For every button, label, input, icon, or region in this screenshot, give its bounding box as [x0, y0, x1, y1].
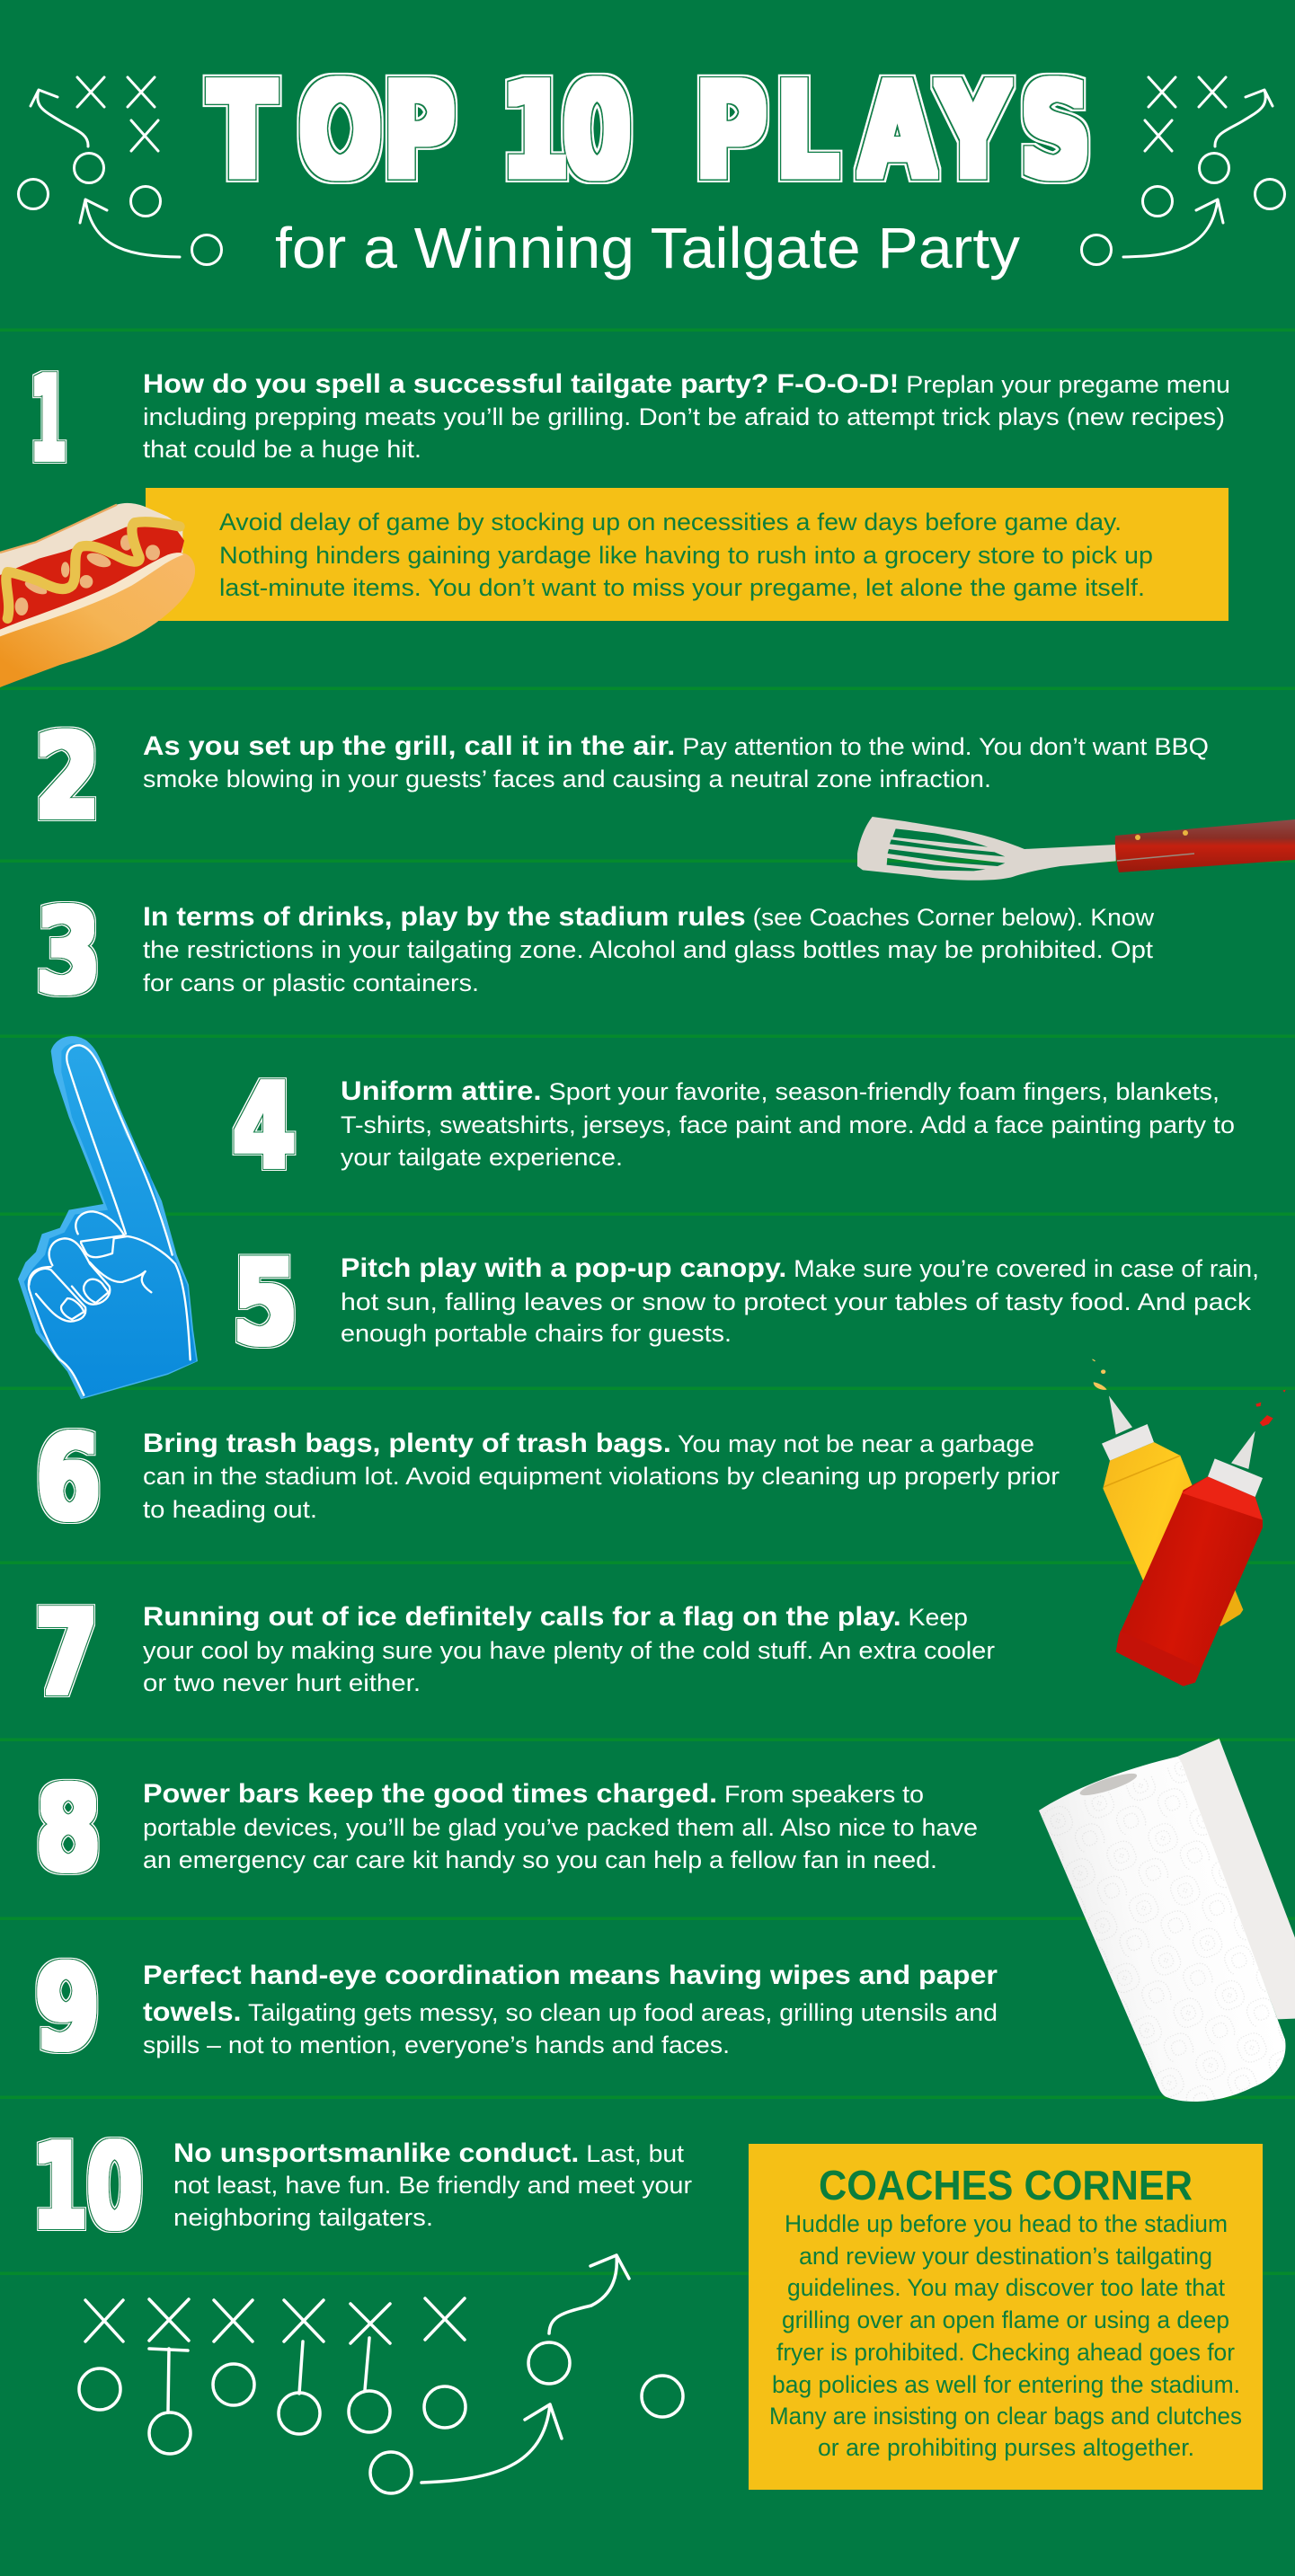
- play 9 text: [143, 1961, 998, 2058]
- play 3 text: [143, 902, 1155, 996]
- play 4 text: [341, 1076, 1235, 1171]
- play 1 text: How do you spell a successful tailgate party? F-O-O-D! Preplan your pregame menu: [143, 369, 1230, 399]
- title: 10: [501, 57, 631, 206]
- play diagram: top right: [1082, 77, 1285, 264]
- callout: stock up: [146, 488, 1228, 621]
- play 4 text: Uniform attire. Sport your favorite, season-friendly foam fingers, blankets,: [341, 1076, 1220, 1106]
- coaches corner body: guidelines. You may discover too late that: [787, 2274, 1226, 2301]
- play 10 text: No unsportsmanlike conduct. Last, but: [173, 2138, 685, 2168]
- play 8: [36, 1763, 978, 1897]
- play 2 text: As you set up the grill, call it in the air. Pay attention to the wind. You don’t want BBQ: [143, 731, 1209, 761]
- callout: stock up: Avoid delay of game by stocking up on necessities a few days before game day.: [219, 509, 1122, 536]
- icon: foam finger: [18, 1036, 198, 1399]
- play 7: [35, 1587, 995, 1721]
- play 10 text: neighboring tailgaters.: [173, 2204, 433, 2231]
- icon: spatula: [857, 817, 1295, 881]
- play 8 text: an emergency car care kit handy so you can help a fellow fan in need.: [143, 1846, 937, 1873]
- coaches corner body: and review your destination’s tailgating: [799, 2243, 1212, 2270]
- play 3: [36, 885, 1155, 1019]
- title: PLAYS: [696, 57, 1090, 206]
- play 4 text: your tailgate experience.: [341, 1144, 623, 1171]
- play 5 text: [341, 1253, 1259, 1347]
- play 4 text: T-shirts, sweatshirts, jerseys, face paint and more. Add a face painting party to: [341, 1111, 1235, 1138]
- play 9 text: towels. Tailgating gets messy, so clean up food areas, grilling utensils and: [143, 1997, 998, 2027]
- play 1 text: including prepping meats you’ll be grilling. Don’t be afraid to attempt trick plays (new recipes): [143, 403, 1225, 430]
- play 6 text: [143, 1429, 1060, 1523]
- number 4: 4: [233, 1060, 296, 1194]
- coaches corner heading: COACHES CORNER: [819, 2162, 1193, 2209]
- play 5 text: enough portable chairs for guests.: [341, 1320, 732, 1347]
- play 6 text: can in the stadium lot. Avoid equipment violations by cleaning up properly prior: [143, 1463, 1060, 1490]
- play 8 text: Power bars keep the good times charged. From speakers to: [143, 1779, 924, 1809]
- play 5 text: Pitch play with a pop-up canopy. Make sure you’re covered in case of rain,: [341, 1253, 1259, 1283]
- icon: mustard and ketchup bottles: [1092, 1359, 1286, 1686]
- play 10 text: [173, 2138, 692, 2231]
- play diagram: bottom: [79, 2255, 683, 2493]
- play 8 text: portable devices, you’ll be glad you’ve packed them all. Also nice to have: [143, 1814, 978, 1841]
- play 1: 1: [31, 353, 66, 487]
- play 2 text: [143, 731, 1209, 792]
- play 7 text: [143, 1602, 995, 1696]
- play 5 text: hot sun, falling leaves or snow to protect your tables of tasty food. And pack: [341, 1288, 1252, 1315]
- coaches corner body: or are prohibiting purses altogether.: [818, 2434, 1194, 2461]
- number 9: 9: [35, 1942, 100, 2076]
- play 9: [35, 1942, 998, 2076]
- play 8 text: [143, 1779, 978, 1873]
- coaches corner body: fryer is prohibited. Checking ahead goes for: [776, 2339, 1235, 2366]
- number 8: 8: [36, 1763, 101, 1897]
- coaches corner body: grilling over an open flame or using a deep: [782, 2306, 1229, 2333]
- coaches corner body: [769, 2210, 1242, 2461]
- coaches corner body: Huddle up before you head to the stadium: [785, 2210, 1228, 2237]
- play 4: [233, 1060, 1235, 1194]
- play 1 text: [143, 369, 1230, 463]
- number 7: 7: [35, 1587, 98, 1721]
- play 3 text: for cans or plastic containers.: [143, 969, 479, 996]
- play 2 text: smoke blowing in your guests’ faces and causing a neutral zone infraction.: [143, 766, 991, 792]
- play 2: [35, 711, 1209, 845]
- callout: stock up: last-minute items. You don’t want to miss your pregame, let alone the game itself.: [219, 574, 1145, 601]
- title: [209, 57, 1090, 206]
- mustard bottle: [1092, 1359, 1243, 1626]
- play 7 text: or two never hurt either.: [143, 1669, 421, 1696]
- play 9 text: Perfect hand-eye coordination means having wipes and paper: [143, 1961, 998, 1990]
- callout: stock up: Nothing hinders gaining yardage like having to rush into a grocery store to pick up: [219, 542, 1153, 569]
- play 6 text: to heading out.: [143, 1496, 317, 1523]
- coaches corner body: bag policies as well for entering the stadium.: [772, 2371, 1240, 2398]
- play diagram: top left: [18, 77, 221, 264]
- play 3 text: the restrictions in your tailgating zone. Alcohol and glass bottles may be prohibited. Opt: [143, 936, 1154, 963]
- number 5: 5: [233, 1236, 297, 1370]
- number 3: 3: [36, 885, 101, 1019]
- play 7 text: your cool by making sure you have plenty of the cold stuff. An extra cooler: [143, 1637, 995, 1664]
- play 10: [32, 2120, 692, 2254]
- play 3 text: In terms of drinks, play by the stadium rules (see Coaches Corner below). Know: [143, 902, 1155, 932]
- icon: hot dog: [0, 503, 195, 687]
- play 7 text: Running out of ice definitely calls for a flag on the play. Keep: [143, 1602, 968, 1632]
- icon: paper towel roll: [1039, 1739, 1295, 2102]
- ketchup bottle: [1116, 1390, 1286, 1686]
- subtitle: for a Winning Tailgate Party: [275, 216, 1020, 280]
- coaches corner body: Many are insisting on clear bags and clutches: [769, 2403, 1242, 2430]
- number 2: 2: [35, 711, 100, 845]
- play 1 text: that could be a huge hit.: [143, 436, 421, 463]
- number 6: 6: [36, 1412, 101, 1545]
- play 1: [31, 353, 1230, 487]
- coaches corner panel: [749, 2144, 1263, 2490]
- play 6: [36, 1412, 1060, 1545]
- play 9 text: spills – not to mention, everyone’s hands and faces.: [143, 2032, 730, 2058]
- title: TOP: [209, 57, 455, 206]
- play 6 text: Bring trash bags, plenty of trash bags. You may not be near a garbage: [143, 1429, 1034, 1458]
- number 10: 10: [32, 2120, 142, 2254]
- play 10 text: not least, have fun. Be friendly and meet your: [173, 2172, 692, 2199]
- play 5: [233, 1236, 1259, 1370]
